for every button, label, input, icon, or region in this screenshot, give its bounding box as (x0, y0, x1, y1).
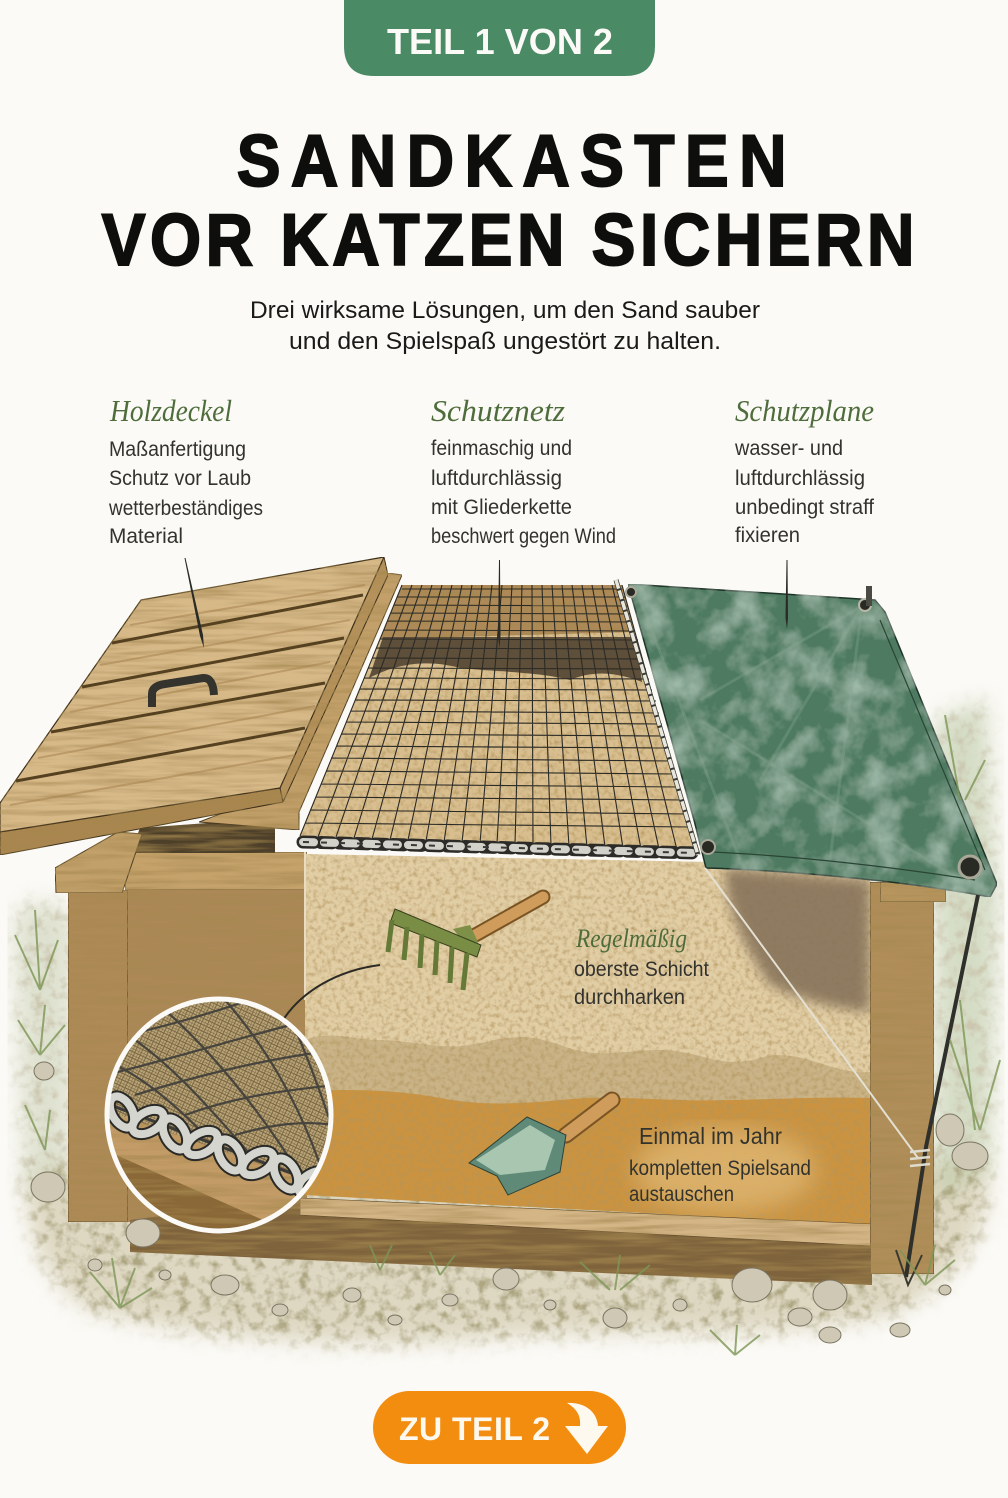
sand labels: Regelmäßig (575, 924, 687, 953)
sand labels: oberste Schicht (574, 958, 709, 981)
sand labels: Einmal im Jahr (639, 1123, 782, 1149)
right post (870, 882, 934, 1274)
label: Schutznetz: mit Gliederkette (431, 496, 572, 519)
label: Schutzplane: fixieren (735, 524, 800, 547)
stones (31, 1062, 988, 1343)
title: SANDKASTEN (237, 120, 787, 202)
sandbox body (55, 818, 946, 1285)
bottom beam (130, 1198, 872, 1285)
label: Schutznetz: luftdurchlässig (431, 467, 562, 490)
net grid (300, 585, 695, 850)
sand labels: kompletten Spielsand (629, 1157, 811, 1180)
label: Schutznetz (431, 393, 616, 548)
label: Holzdeckel: wetterbeständiges (108, 497, 263, 520)
white rope edge (616, 580, 698, 855)
tarp (616, 580, 997, 897)
chain (303, 842, 695, 853)
back left wood panel (125, 852, 307, 1222)
wooden lid (0, 557, 402, 855)
lid grain streaks (10, 585, 365, 805)
sand lower layer (305, 1090, 870, 1225)
button: zu Teil 2: ZU TEIL 2 (399, 1411, 550, 1447)
sand labels: austauschen (629, 1183, 734, 1206)
sand labels: durchharken (574, 986, 685, 1009)
left post (68, 890, 128, 1222)
title (102, 120, 914, 281)
inset: chain detail (105, 965, 380, 1235)
callout arrows (184, 558, 788, 648)
label: Holzdeckel: Material (109, 525, 183, 548)
right inner wood panel (725, 868, 870, 1012)
dark inner gap (130, 818, 275, 853)
sand middle layer (305, 1036, 870, 1110)
label: Schutzplane: unbedingt straff (735, 496, 874, 519)
label: Holzdeckel: Schutz vor Laub (109, 467, 251, 490)
grass tufts (15, 715, 1000, 1355)
net panel (300, 585, 695, 853)
rake (388, 897, 543, 990)
lower support board (199, 573, 402, 830)
label: Schutznetz: beschwert gegen Wind (431, 525, 616, 548)
label: Schutznetz: feinmaschig und (431, 437, 572, 460)
button: zu Teil 2 (373, 1391, 626, 1464)
sand upper layer (305, 854, 870, 1090)
label: Schutzplane: wasser- und (734, 437, 843, 460)
guy rope and ground stake (705, 868, 978, 1285)
sand labels (574, 924, 811, 1206)
label: Schutzplane: Schutzplane (735, 393, 874, 428)
handle (152, 678, 214, 707)
label: Schutzplane: luftdurchlässig (735, 467, 865, 490)
plank seams (16, 595, 363, 781)
ground and vegetation wash (14, 700, 998, 1343)
scoop (469, 1100, 612, 1195)
lid edge (0, 788, 283, 855)
label: Holzdeckel: Maßanfertigung (109, 438, 246, 461)
label: Schutznetz: Schutznetz (431, 393, 565, 428)
top tab: Teil 1 von 2: TEIL 1 VON 2 (387, 21, 613, 62)
title: VOR KATZEN SICHERN (102, 199, 914, 281)
subtitle (250, 297, 760, 355)
subtitle: und den Spielspaß ungestört zu halten. (289, 328, 721, 355)
top tab: Teil 1 von 2 (344, 0, 655, 76)
left post cap (55, 832, 142, 893)
label: Schutzplane (734, 393, 874, 547)
label: Holzdeckel (108, 393, 263, 548)
icon: down arrow (565, 1403, 608, 1454)
lid top (0, 557, 384, 832)
eyelets and pegs (859, 599, 871, 611)
subtitle: Drei wirksame Lösungen, um den Sand sauber (250, 297, 760, 324)
label: Holzdeckel: Holzdeckel (109, 393, 232, 428)
